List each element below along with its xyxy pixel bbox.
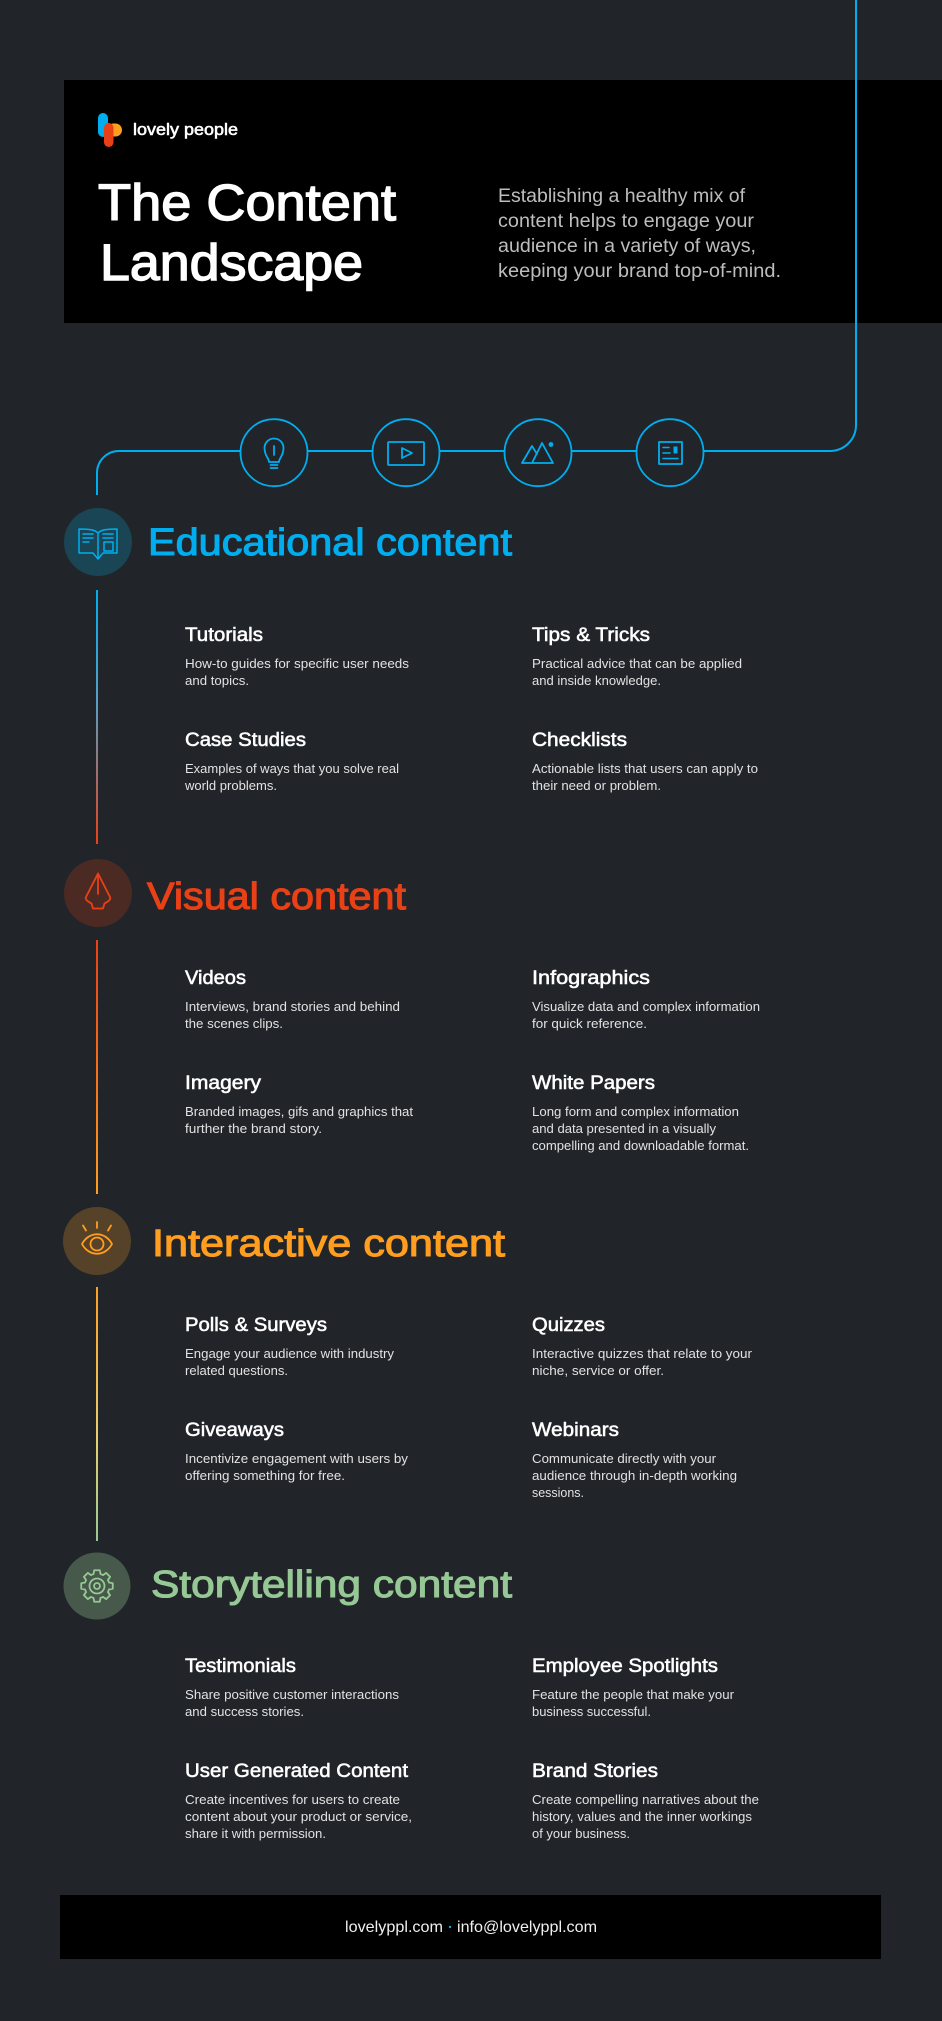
item: infographics: Visualize data and complex information xyxy=(532,999,760,1014)
item: case studies xyxy=(184,729,399,793)
item: case studies: world problems. xyxy=(184,778,277,793)
logo xyxy=(98,113,238,147)
item: infographics: for quick reference. xyxy=(532,1016,647,1031)
item: giveaways: Giveaways xyxy=(185,1419,284,1441)
item: brand stories: history, values and the inner workings xyxy=(532,1809,752,1824)
item: user generated content: content about your product or service, xyxy=(185,1809,412,1824)
connector line from top to educational section xyxy=(97,0,856,495)
format icons row xyxy=(240,419,704,486)
icon: open book xyxy=(64,508,132,576)
title xyxy=(98,174,396,291)
item: brand stories: of your business. xyxy=(532,1826,630,1841)
heading: Educational content xyxy=(148,522,512,564)
timeline line xyxy=(96,590,98,844)
section: visual content xyxy=(64,859,760,1194)
item: checklists: Checklists xyxy=(532,729,627,751)
intro text: keeping your brand top-of-mind. xyxy=(498,260,781,282)
item: tips and tricks: Tips & Tricks xyxy=(532,624,650,646)
section: educational content xyxy=(64,508,758,844)
intro text: content helps to engage your xyxy=(498,210,755,232)
item: employee spotlights xyxy=(532,1655,735,1719)
item: tutorials: Tutorials xyxy=(185,624,263,646)
title: The Content xyxy=(98,174,396,231)
intro text: audience in a variety of ways, xyxy=(498,235,756,257)
item: polls and surveys xyxy=(185,1314,395,1378)
section: interactive content xyxy=(63,1207,753,1541)
item: tutorials: and topics. xyxy=(185,673,249,688)
item: brand stories: Brand Stories xyxy=(532,1760,658,1782)
icon: eye xyxy=(63,1207,131,1275)
logo mark xyxy=(98,113,122,147)
item: tips and tricks: and inside knowledge. xyxy=(532,673,661,688)
item: tips and tricks xyxy=(532,624,742,688)
icon: mountains image xyxy=(504,419,572,486)
header background xyxy=(64,80,942,323)
item: tutorials xyxy=(185,624,410,688)
item: checklists xyxy=(532,729,758,793)
item: webinars: audience through in-depth working xyxy=(532,1468,737,1483)
item: case studies: Examples of ways that you solve real xyxy=(185,761,399,776)
item: videos xyxy=(185,967,400,1031)
item: imagery: Imagery xyxy=(185,1072,261,1094)
intro text xyxy=(498,185,781,282)
item: imagery: further the brand story. xyxy=(185,1121,322,1136)
item: infographics xyxy=(532,967,760,1031)
item: testimonials xyxy=(185,1655,400,1719)
item: videos: the scenes clips. xyxy=(185,1016,283,1031)
item: user generated content: Create incentives for users to create xyxy=(185,1792,400,1807)
heading: Visual content xyxy=(147,876,406,918)
item: case studies: Case Studies xyxy=(185,729,306,751)
item: webinars: Communicate directly with your xyxy=(532,1451,717,1466)
item: white papers: compelling and downloadable format. xyxy=(532,1138,749,1153)
item: testimonials: Testimonials xyxy=(185,1655,296,1677)
item: quizzes xyxy=(532,1314,753,1378)
item: brand stories: Create compelling narratives about the xyxy=(532,1792,759,1807)
logo wordmark: lovely people xyxy=(133,120,238,139)
item: white papers: White Papers xyxy=(532,1072,655,1094)
header panel xyxy=(64,80,942,323)
heading: Interactive content xyxy=(152,1223,505,1265)
item: checklists: Actionable lists that users can apply to xyxy=(532,761,758,776)
item: videos: Interviews, brand stories and behind xyxy=(185,999,400,1014)
item: giveaways xyxy=(185,1419,409,1483)
footer contact text xyxy=(345,1919,597,1936)
item: employee spotlights: Feature the people that make your xyxy=(532,1687,735,1702)
footer xyxy=(60,1895,881,1959)
item: imagery xyxy=(185,1072,413,1136)
item: webinars: sessions. xyxy=(532,1485,584,1500)
icon: light bulb xyxy=(240,419,308,486)
item: brand stories xyxy=(532,1760,759,1841)
item: white papers: and data presented in a visually xyxy=(532,1121,716,1136)
section: storytelling content xyxy=(64,1552,759,1841)
item: quizzes: niche, service or offer. xyxy=(532,1363,664,1378)
heading: Storytelling content xyxy=(151,1564,512,1606)
item: webinars: Webinars xyxy=(532,1419,619,1441)
item: employee spotlights: business successful. xyxy=(532,1704,651,1719)
footer background xyxy=(60,1895,881,1959)
item: polls and surveys: related questions. xyxy=(185,1363,288,1378)
item: white papers xyxy=(532,1072,749,1153)
item: imagery: Branded images, gifs and graphics that xyxy=(185,1104,413,1119)
item: giveaways: Incentivize engagement with users by xyxy=(185,1451,409,1466)
item: infographics: Infographics xyxy=(532,967,650,989)
item: employee spotlights: Employee Spotlights xyxy=(532,1655,718,1677)
footer contact text: lovelyppl.com xyxy=(345,1919,443,1936)
timeline line xyxy=(96,940,98,1194)
item: white papers: Long form and complex information xyxy=(532,1104,739,1119)
title: Landscape xyxy=(100,234,363,291)
item: tutorials: How-to guides for specific user needs xyxy=(185,656,410,671)
item: user generated content: User Generated Content xyxy=(185,1760,409,1782)
item: tips and tricks: Practical advice that can be applied xyxy=(532,656,742,671)
item: user generated content xyxy=(185,1760,412,1841)
item: quizzes: Interactive quizzes that relate to your xyxy=(532,1346,753,1361)
item: testimonials: Share positive customer interactions xyxy=(185,1687,400,1702)
item: polls and surveys: Polls & Surveys xyxy=(185,1314,327,1336)
item: quizzes: Quizzes xyxy=(532,1314,605,1336)
item: giveaways: offering something for free. xyxy=(185,1468,345,1483)
icon: pen nib xyxy=(64,859,132,927)
icon: video player xyxy=(372,419,440,486)
item: polls and surveys: Engage your audience with industry xyxy=(185,1346,395,1361)
icon: gear xyxy=(64,1552,130,1620)
footer contact text: info@lovelyppl.com xyxy=(457,1919,597,1936)
item: testimonials: and success stories. xyxy=(185,1704,304,1719)
timeline line xyxy=(96,1287,98,1541)
intro text: Establishing a healthy mix of xyxy=(498,185,746,207)
item: videos: Videos xyxy=(185,967,246,989)
item: user generated content: share it with permission. xyxy=(185,1826,326,1841)
item: checklists: their need or problem. xyxy=(532,778,661,793)
icon: article document xyxy=(636,419,704,486)
item: webinars xyxy=(532,1419,737,1500)
